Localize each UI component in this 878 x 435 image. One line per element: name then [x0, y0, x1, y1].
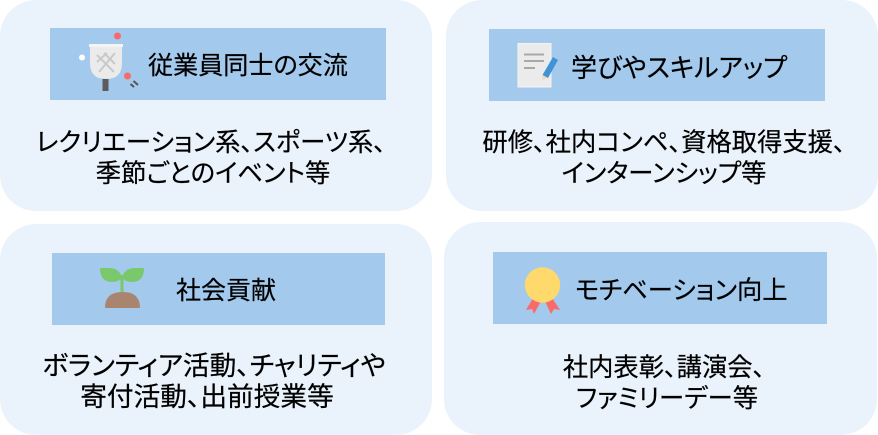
body text: 従業員同士の交流: レクリエーション系、スポーツ系、 — [36, 129, 386, 157]
body text: 社会貢献: ボランティア活動、チャリティや — [42, 350, 386, 380]
panel: 社会貢献 — [0, 224, 432, 435]
panel: モチベーション向上 — [444, 222, 877, 435]
heading: 学びやスキルアップ: 学びやスキルアップ — [571, 52, 787, 82]
heading: モチベーション向上: モチベーション向上 — [575, 277, 788, 305]
body text: 従業員同士の交流: 季節ごとのイベント等 — [96, 160, 330, 188]
header bar: 従業員同士の交流 — [50, 28, 386, 100]
body text: 学びやスキルアップ: 研修、社内コンペ、資格取得支援、 — [482, 129, 846, 157]
body text: 従業員同士の交流 — [36, 128, 386, 188]
body text: モチベーション向上: ファミリーデー等 — [576, 384, 758, 412]
body text: 学びやスキルアップ — [482, 129, 846, 188]
header bar: モチベーション向上 — [493, 252, 827, 324]
panel: 従業員同士の交流 — [0, 0, 432, 211]
body text: 社会貢献: 寄付活動、出前授業等 — [80, 382, 334, 412]
heading: 従業員同士の交流: 従業員同士の交流 — [148, 52, 348, 80]
header bar: 社会貢献 — [52, 253, 385, 325]
body text: モチベーション向上: 社内表彰、講演会、 — [563, 354, 765, 382]
panel: 学びやスキルアップ — [446, 0, 878, 211]
header bar: 学びやスキルアップ — [489, 29, 825, 101]
body text: 学びやスキルアップ: インターンシップ等 — [562, 160, 766, 188]
body text: 社会貢献 — [42, 350, 386, 412]
body text: モチベーション向上 — [563, 354, 765, 412]
heading: 社会貢献: 社会貢献 — [176, 277, 276, 305]
